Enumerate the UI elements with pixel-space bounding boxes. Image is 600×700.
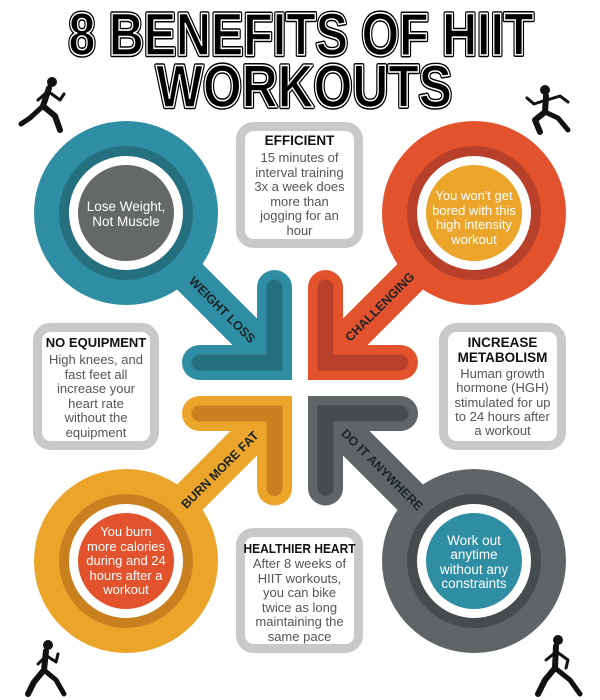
panel: no equipment box [38, 328, 154, 446]
panel: burn more fat (yellow): You burn [100, 524, 152, 539]
icon: runner top right [527, 85, 568, 132]
panel: weight loss (teal) [34, 121, 268, 355]
title [68, 1, 534, 120]
icon: runner bottom right [538, 635, 580, 694]
panel: increase metabolism box: to 24 hours after [455, 409, 551, 424]
panel: increase metabolism box: hormone (HGH) [456, 380, 549, 395]
panel: burn more fat (yellow): hours after a [90, 568, 163, 583]
panel: efficient box: jogging for an [259, 208, 339, 223]
panel: healthier heart box: same pace [268, 629, 331, 644]
panel: healthier heart box: HIIT workouts, [258, 571, 341, 586]
label: weight loss: WEIGHT LOSS [186, 274, 258, 346]
panel: burn more fat (yellow): workout [102, 582, 149, 597]
label: do it anywhere: DO IT ANYWHERE [338, 426, 426, 514]
panel: efficient box: more than [270, 194, 329, 209]
arrow: teal chevron [200, 288, 274, 362]
panel: healthier heart box: HEALTHIER HEART [244, 541, 356, 556]
panel: challenging (orange): workout [450, 232, 497, 247]
label: burn more fat: BURN MORE FAT [179, 428, 262, 511]
panel: do it anywhere (grey): constraints [441, 576, 507, 591]
panel: burn more fat (yellow): more calories [87, 539, 166, 554]
panel: efficient box [240, 126, 358, 244]
panel: efficient box: interval training [255, 165, 344, 180]
panel: do it anywhere (grey) [332, 419, 566, 653]
panel: healthier heart box: you can bike [263, 585, 336, 600]
panel: efficient box: 3x a week does [254, 179, 345, 194]
panel: weight loss (teal): Lose Weight, [87, 199, 165, 214]
arrow: orange chevron [326, 288, 400, 362]
panel: challenging (orange): You won't get [435, 188, 513, 203]
panel: weight loss (teal): Not Muscle [92, 214, 160, 229]
arrow: grey chevron [326, 414, 400, 488]
panel: efficient box: EFFICIENT [265, 133, 335, 148]
panel: no equipment box: fast feet all [65, 367, 128, 382]
panel: increase metabolism box: METABOLISM [458, 350, 547, 365]
panel: no equipment box: heart rate [68, 396, 124, 411]
title: WORKOUTS [156, 53, 452, 120]
panel: no equipment box: NO EQUIPMENT [46, 335, 146, 350]
panel: increase metabolism box: stimulated for up [454, 395, 551, 410]
panel: burn more fat (yellow): during and 24 [86, 553, 166, 568]
label: challenging: CHALLENGING [343, 270, 417, 344]
panel: no equipment box: without the [64, 410, 127, 425]
panel: do it anywhere (grey): anytime [450, 547, 498, 562]
panel: challenging (orange): bored with this [432, 203, 516, 218]
panel: efficient box: hour [286, 223, 313, 238]
panel: no equipment box: High knees, and [49, 352, 143, 367]
panel: challenging (orange): high intensity [436, 217, 512, 232]
panel: challenging (orange) [332, 121, 566, 355]
panel: increase metabolism box: INCREASE [468, 335, 537, 350]
icon: runner top left [21, 77, 64, 130]
panel: increase metabolism box [444, 328, 562, 446]
arrow: yellow chevron [200, 414, 274, 488]
panel: efficient box: 15 minutes of [260, 150, 339, 165]
panel: healthier heart box: twice as long [262, 600, 337, 615]
panel: no equipment box: equipment [66, 425, 127, 440]
panel: healthier heart box: After 8 weeks of [253, 556, 346, 571]
panel: healthier heart box [240, 532, 358, 648]
panel: do it anywhere (grey): Work out [447, 533, 501, 548]
title: WORKOUTS [156, 53, 452, 120]
panel: burn more fat (yellow) [34, 419, 268, 653]
panel: increase metabolism box: a workout [474, 423, 531, 438]
icon: runner bottom left [28, 640, 64, 694]
panel: increase metabolism box: Human growth [460, 366, 545, 381]
panel: no equipment box: increase your [57, 381, 136, 396]
panel: healthier heart box: maintaining the [255, 614, 344, 629]
panel: do it anywhere (grey): without any [439, 562, 508, 577]
